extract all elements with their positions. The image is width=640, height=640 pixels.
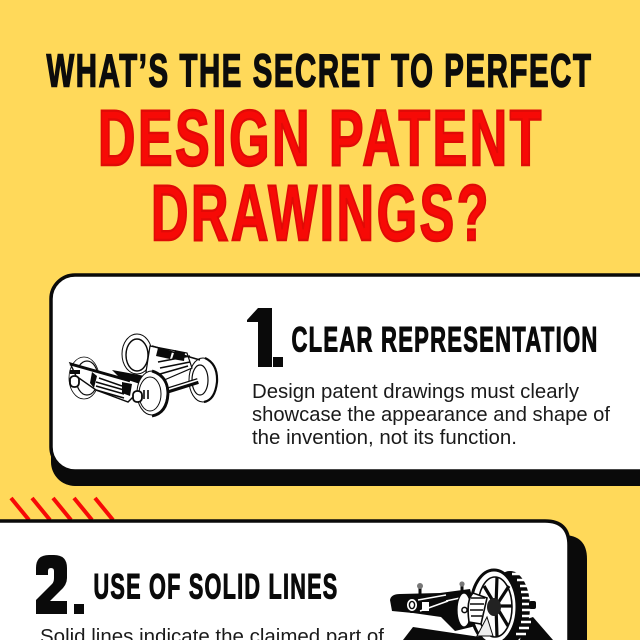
body text: Design patent drawings must clearly [252,381,579,403]
left wheel [69,357,99,399]
panel: clear representation [51,275,640,486]
axle [166,381,198,391]
icon: railway bogie illustration [69,334,217,416]
flywheel face [471,570,517,640]
heading: use of solid lines: USE OF SOLID LINES [94,568,338,606]
decorative red stripes [11,498,113,520]
icon: engine illustration [390,570,553,640]
body text [252,381,610,449]
card shadow [0,535,587,640]
bolts [420,584,462,594]
journal box left [70,376,79,387]
title [46,44,592,257]
card body [0,521,569,640]
front side frame [70,363,146,402]
card body [51,275,640,471]
spokes [484,577,512,637]
cylinder body [390,589,480,631]
base [403,627,500,640]
rear wheels [122,334,152,374]
piston rod and crosshead [406,598,418,612]
rear frame [146,346,192,381]
journal box right [133,391,142,402]
flywheel rim [490,571,530,640]
bearing [457,593,471,627]
panel: use of solid lines [0,521,587,640]
front wheel [137,371,167,415]
body text: the invention, not its function. [252,427,517,449]
body text: showcase the appearance and shape of [252,404,610,426]
number 1 [247,308,283,367]
card shadow [51,290,640,486]
crank web [468,593,487,624]
shaft end [529,601,536,609]
number 2 [36,555,84,614]
